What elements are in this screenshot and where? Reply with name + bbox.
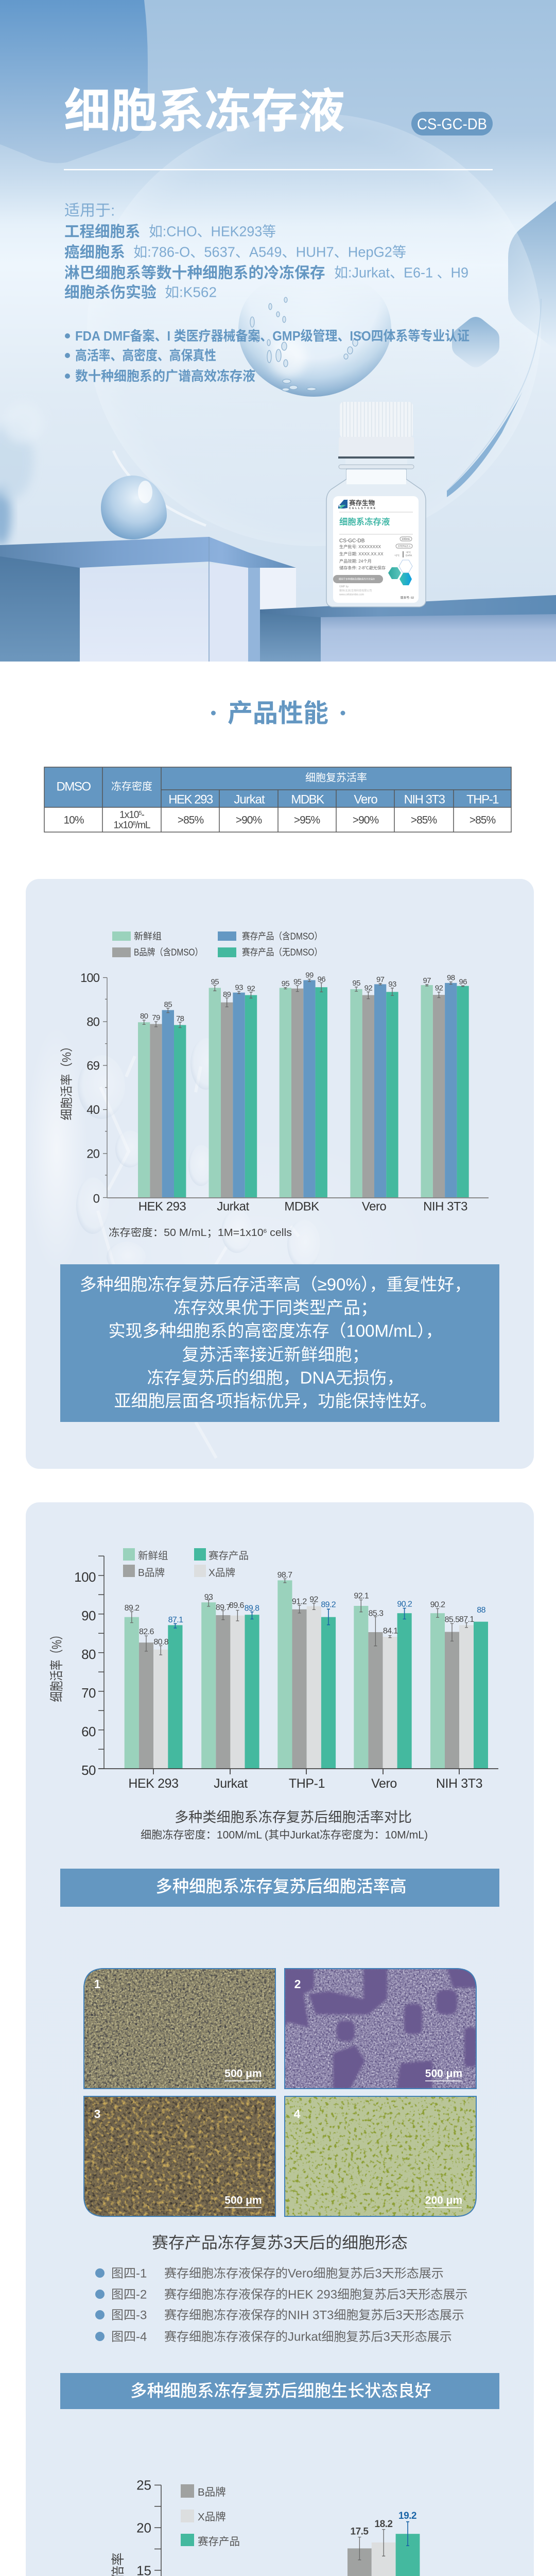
bars: 72h: 18.2 <box>375 2519 392 2530</box>
y axis: 25 <box>136 2478 151 2493</box>
legend: 赛存产品（无DMSO） <box>242 947 322 957</box>
x axis labels: NIH 3T3 <box>423 1199 467 1213</box>
applicable cell lines: 癌细胞系 <box>64 244 125 261</box>
performance table: >90% <box>236 814 262 826</box>
micrograph 1: 500 μm <box>224 2067 262 2079</box>
micrograph 3 <box>83 2096 276 2217</box>
applicable cell lines: 工程细胞系 <box>64 223 141 240</box>
performance table: MDBK <box>291 792 324 806</box>
legend: X品牌 <box>198 2511 226 2523</box>
small water drop <box>0 427 167 545</box>
legend: B品牌 <box>198 2486 226 2498</box>
micrograph legend list: 图四-4 <box>111 2330 147 2344</box>
legend: X品牌 <box>208 1567 235 1579</box>
bottle label: 细胞系冻存液 <box>339 517 390 527</box>
bars: Vero: 90.2 <box>397 1600 412 1609</box>
legend: 赛存产品 <box>198 2536 240 2548</box>
applicable cell lines: 如:K562 <box>165 284 217 300</box>
conclusion bar: viability <box>60 1869 499 1907</box>
bars: NIH 3T3: 87.1 <box>459 1615 474 1624</box>
micrograph 3: 3 <box>94 2107 100 2121</box>
bars: Vero: 93 <box>388 980 396 989</box>
bars: NIH 3T3: 96 <box>459 978 467 987</box>
bottle label: +2°C <box>394 554 400 557</box>
performance table: 5 <box>138 810 142 817</box>
bottle label: +8°C <box>406 551 411 554</box>
performance table: 细胞复苏活率 <box>305 772 367 784</box>
bottle label: CS-GC-DB <box>339 538 365 544</box>
bars: NIH 3T3: 92 <box>435 984 443 993</box>
bars: MDBK <box>280 971 327 1197</box>
applicable cell lines <box>64 202 468 301</box>
decorative hexagon top left <box>0 0 148 163</box>
y axis: 100 <box>74 1569 96 1585</box>
left glass cube <box>0 537 296 662</box>
bottle label: 产品效期: 24个月 <box>339 558 372 564</box>
chart: NIH3T3 proliferation <box>111 2478 435 2576</box>
bars: HEK 293: 79 <box>152 1013 160 1022</box>
bars: THP-1 <box>277 1571 336 1769</box>
micrograph caption: 赛存产品冻存复苏3天后的细胞形态 <box>152 2234 408 2252</box>
performance table: 冻存密度 <box>111 781 152 792</box>
bars: NIH 3T3: 98 <box>447 973 455 982</box>
y axis <box>111 2478 161 2576</box>
bars: Jurkat: 95 <box>211 977 219 986</box>
micrograph 2 <box>284 1968 477 2089</box>
micrograph legend list: 图四-3 <box>111 2308 147 2322</box>
legend: 赛存产品 <box>208 1550 249 1562</box>
bars: Jurkat: 93 <box>235 983 243 992</box>
y axis: 80 <box>81 1647 96 1662</box>
micrograph 2: 2 <box>294 1977 301 1991</box>
bottle label: DARK <box>406 554 412 557</box>
y axis <box>60 971 107 1206</box>
feature bullets: FDA DMF备案、I 类医疗器械备案、GMP级管理、ISO四体系等专业认证 <box>75 328 470 344</box>
callout: conclusion box <box>60 1264 499 1422</box>
y axis: 70 <box>81 1685 96 1701</box>
micrograph 2: 500 μm <box>425 2067 462 2079</box>
bars: Vero: 97 <box>376 975 385 984</box>
micrograph legend list: 赛存细胞冻存液保存的Jurkat细胞复苏后3天形态展示 <box>164 2330 452 2344</box>
bars: 72h: 17.5 <box>351 2527 369 2537</box>
bars: Jurkat: 89.6 <box>229 1601 244 1610</box>
performance table: >90% <box>353 814 378 826</box>
bars: HEK 293: 89.2 <box>125 1604 140 1613</box>
x axis labels: NIH 3T3 <box>436 1776 482 1791</box>
applicable cell lines: 如:Jurkat、E6-1 、H9 <box>334 265 468 281</box>
bars: HEK 293: 80.8 <box>153 1638 169 1647</box>
bottle label: 生产日期: XXXX.XX.XX <box>339 551 384 556</box>
bars: Vero: 92 <box>364 984 372 993</box>
bars: Jurkat <box>209 977 257 1197</box>
hero banner <box>0 0 556 662</box>
performance table: 1x10 <box>119 810 138 821</box>
bars: Vero: 95 <box>352 979 360 988</box>
performance table: DMSO <box>57 779 91 793</box>
bars: Jurkat <box>201 1593 259 1769</box>
micrograph legend list: 图四-2 <box>111 2287 147 2301</box>
y axis: 80 <box>86 1015 100 1029</box>
performance table: >95% <box>294 814 320 826</box>
applicable cell lines: 如:CHO、HEK293等 <box>149 224 276 240</box>
chart caption: 多种类细胞系冻存复苏后细胞活率对比 <box>175 1809 412 1825</box>
bottle label: 赛存(北京)生物科技有限公司 <box>339 589 372 592</box>
applicable cell lines: 适用于: <box>64 202 115 219</box>
performance table: HEK 293 <box>168 792 213 806</box>
performance table: 10% <box>63 814 84 826</box>
micrograph 4: 200 μm <box>425 2194 462 2206</box>
micrograph 1 <box>83 1968 276 2089</box>
bottle label <box>333 496 419 603</box>
bottle label: 100mL <box>402 538 410 541</box>
callout: conclusion box: 亚细胞层面各项指标优异，功能保持性好。 <box>114 1392 437 1411</box>
bars: Jurkat: 89.8 <box>245 1604 259 1613</box>
x axis labels <box>128 1776 482 1791</box>
legend <box>123 1548 249 1579</box>
x axis labels <box>138 1199 467 1213</box>
micrograph 1: 1 <box>94 1977 101 1991</box>
bottle label: 赛存生物 <box>349 499 375 506</box>
bottle label: 储存条件: 2-8℃避光保存 <box>339 565 386 570</box>
bars: MDBK: 95 <box>293 978 302 987</box>
x axis labels: HEK 293 <box>128 1776 179 1791</box>
bars: HEK 293 <box>125 1604 183 1769</box>
title: 细胞系冻存液 <box>64 86 345 138</box>
bars: Jurkat: 92 <box>247 985 255 993</box>
small hexagon <box>452 317 499 367</box>
bars: NIH 3T3: 88 <box>477 1606 486 1615</box>
performance table: >85% <box>470 814 495 826</box>
bars: MDBK: 95 <box>282 979 289 988</box>
freezing density note: 冻存密度：50 M/mL；1M=1x10 <box>109 1227 253 1239</box>
bars: 72h <box>348 2511 420 2576</box>
water sphere <box>238 297 391 397</box>
bars: Vero: 92.1 <box>354 1592 369 1601</box>
performance table: >85% <box>411 814 437 826</box>
bars: NIH 3T3 <box>421 973 469 1197</box>
chart: viability bars <box>60 931 489 1213</box>
bars: NIH 3T3: 85.5 <box>445 1616 460 1624</box>
performance table: >85% <box>178 814 203 826</box>
y axis: 50 <box>81 1762 96 1778</box>
x axis labels: HEK 293 <box>138 1199 186 1213</box>
performance table: NIH 3T3 <box>404 792 445 806</box>
callout: conclusion box: 实现多种细胞系的高密度冻存（100M/mL）， <box>108 1321 443 1341</box>
bottle label: 细用于多种细胞及细胞系的冷冻保存 <box>339 578 375 581</box>
chart caption: 细胞冻存密度：100M/mL (其中Jurkat冻存密度为：10M/mL) <box>141 1829 428 1841</box>
y axis: 40 <box>86 1103 100 1117</box>
panel: viability comparison 1 <box>26 879 534 1469</box>
bars: MDBK: 96 <box>318 975 325 984</box>
micrograph legend list: 图四-1 <box>111 2266 147 2280</box>
bars: THP-1: 89.2 <box>321 1600 336 1609</box>
bars: 72h: 19.2 <box>398 2511 416 2521</box>
micrograph legend list: 赛存细胞冻存液保存的Vero细胞复苏后3天形态展示 <box>164 2266 444 2280</box>
bars: Vero: 85.3 <box>369 1609 384 1618</box>
applicable cell lines: 如:786-O、5637、A549、HUH7、HepG2等 <box>133 244 406 260</box>
bars: MDBK: 99 <box>305 971 314 979</box>
legend: 赛存产品（含DMSO） <box>242 931 322 941</box>
large transparent bubble <box>87 113 541 546</box>
y axis: 细胞活率（%） <box>49 1629 64 1702</box>
bottle label: www.cellstorebio.com <box>339 593 364 596</box>
bars: Vero <box>350 975 398 1197</box>
x axis labels: Vero <box>362 1199 386 1213</box>
bars: Jurkat: 89.7 <box>216 1603 231 1612</box>
micrograph 4: 4 <box>294 2107 301 2121</box>
x axis labels: Jurkat <box>217 1199 250 1213</box>
feature bullets <box>65 328 470 384</box>
callout: conclusion box: 冻存复苏后的细胞，DNA无损伤， <box>147 1368 404 1387</box>
product bottle <box>326 402 426 607</box>
y axis: 20 <box>86 1147 100 1161</box>
bars: Jurkat: 89 <box>223 990 231 999</box>
bars: Vero: 84.1 <box>383 1626 398 1635</box>
y axis: 20 <box>136 2520 151 2535</box>
performance table: 1x10 <box>113 820 133 831</box>
performance table: 8 <box>133 821 136 827</box>
callout: conclusion box: 冻存效果优于同类型产品； <box>173 1298 377 1317</box>
y axis: 90 <box>81 1608 96 1623</box>
bottle label: CELLSTORE <box>349 507 377 510</box>
legend <box>181 2484 240 2548</box>
bars: THP-1: 91.2 <box>292 1597 307 1606</box>
conclusion bar: morphology <box>60 2373 499 2409</box>
conclusion bar: viability: 多种细胞系冻存复苏后细胞活率高 <box>155 1877 407 1895</box>
product code pill <box>411 112 493 135</box>
bottle label: GMP by <box>339 585 349 588</box>
x axis labels: THP-1 <box>289 1776 325 1791</box>
y axis: 60 <box>81 1724 96 1739</box>
micrograph legend list <box>95 2266 467 2344</box>
callout: conclusion box: 复苏活率接近新鲜细胞； <box>182 1345 369 1364</box>
bars: Vero <box>354 1592 412 1769</box>
conclusion bar: morphology: 多种细胞系冻存复苏后细胞生长状态良好 <box>130 2381 431 2400</box>
section heading: product performance: 产品性能 <box>228 700 328 727</box>
micrograph 3: 500 μm <box>224 2194 262 2206</box>
y axis: 0 <box>93 1192 100 1206</box>
micrograph 4 <box>284 2096 477 2217</box>
legend: 新鲜组 <box>138 1550 168 1562</box>
bars: HEK 293: 87.1 <box>168 1616 183 1624</box>
bottle label: 版本号: 02 <box>401 596 414 600</box>
bars: HEK 293 <box>138 1000 186 1197</box>
applicable cell lines: 淋巴细胞系等数十种细胞系的冷冻保存 <box>64 264 325 281</box>
bars: HEK 293: 78 <box>176 1014 184 1023</box>
chart caption <box>141 1809 428 1841</box>
y axis: 100 <box>80 971 100 985</box>
bottle label: STERILE A <box>398 545 411 548</box>
panel: viability, morphology, proliferation <box>26 1502 534 2576</box>
performance table: /mL <box>135 820 150 831</box>
y axis <box>49 1556 104 1778</box>
product code pill: CS-GC-DB <box>417 115 487 133</box>
performance table: - <box>141 810 144 821</box>
feature bullets: 数十种细胞系的广谱高效冻存液 <box>75 368 255 384</box>
freezing density note: 6 <box>264 1228 267 1234</box>
bottle label: 生产批号: XXXXXXXX <box>339 544 381 549</box>
x axis labels: MDBK <box>284 1199 319 1213</box>
performance table <box>44 767 511 832</box>
bars: HEK 293: 82.6 <box>139 1628 154 1636</box>
bars: Jurkat: 93 <box>204 1593 213 1602</box>
y axis: 细胞活率（%） <box>60 1041 74 1120</box>
performance table: THP-1 <box>466 792 499 806</box>
bars: NIH 3T3 <box>430 1600 488 1769</box>
performance table: Vero <box>354 792 377 806</box>
bars: NIH 3T3: 97 <box>423 976 431 985</box>
chart: viability comparison 2 <box>49 1548 498 1791</box>
feature bullets: 高活率、高密度、高保真性 <box>75 348 216 363</box>
freezing density note: cells <box>267 1227 292 1239</box>
x axis labels: Jurkat <box>214 1776 248 1791</box>
bars: NIH 3T3: 90.2 <box>430 1600 445 1609</box>
micrograph legend list: 赛存细胞冻存液保存的NIH 3T3细胞复苏后3天形态展示 <box>164 2308 464 2322</box>
callout: conclusion box: 多种细胞冻存复苏后存活率高（≥90%），重复性好， <box>80 1275 471 1294</box>
y axis: 69 <box>86 1059 100 1073</box>
right glass cube <box>260 595 556 662</box>
legend: B品牌（含DMSO） <box>134 947 203 957</box>
x axis labels: Vero <box>371 1776 397 1791</box>
performance table: Jurkat <box>234 792 265 806</box>
micrograph legend list: 赛存细胞冻存液保存的HEK 293细胞复苏后3天形态展示 <box>164 2287 467 2301</box>
bars: HEK 293: 80 <box>140 1012 148 1021</box>
legend <box>112 931 322 957</box>
legend: 新鲜组 <box>134 931 162 941</box>
bars: THP-1: 98.7 <box>277 1571 292 1580</box>
legend: B品牌 <box>138 1567 165 1579</box>
bars: HEK 293: 85 <box>164 1000 172 1009</box>
bars: THP-1: 92 <box>309 1596 318 1604</box>
applicable cell lines: 细胞杀伤实验 <box>64 284 157 301</box>
decorative hexagon right <box>508 201 556 350</box>
